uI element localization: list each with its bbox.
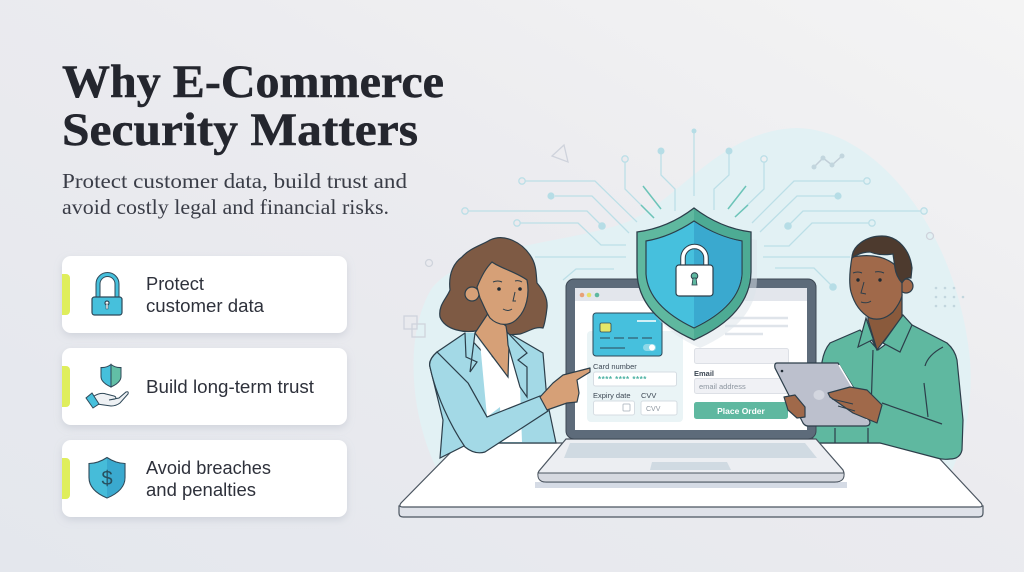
neck (868, 295, 902, 350)
teal accent strokes (641, 186, 748, 218)
label: protect customer data: Protect (146, 274, 204, 294)
man left hand (784, 395, 805, 418)
label: build long-term trust: Build long-term trust (146, 377, 314, 397)
decorative shapes (404, 145, 934, 337)
man (850, 236, 913, 352)
mini chart dots and dot grid (812, 154, 964, 307)
title: Why E-Commerce (62, 56, 444, 108)
card form fields: Card number (593, 362, 637, 371)
icon: padlock (92, 274, 122, 315)
title (62, 56, 444, 156)
neck (475, 312, 509, 377)
collar left (858, 318, 877, 350)
card: avoid breaches (62, 440, 347, 517)
laptop base (535, 482, 847, 488)
order form: Place Order (717, 406, 766, 416)
window dots (580, 293, 599, 297)
card: protect customer data (62, 256, 347, 333)
hair (440, 238, 547, 335)
card form fields: **** **** **** (598, 375, 647, 384)
subtitle: Protect customer data, build trust and (62, 169, 408, 193)
label: avoid breaches and penalties (146, 458, 271, 500)
jacket torso (430, 332, 556, 458)
subtitle (62, 169, 408, 219)
title: Security Matters (62, 104, 418, 156)
woman pointing hand (540, 368, 590, 410)
man right hand (828, 387, 882, 423)
credit card (593, 313, 662, 356)
card: build long-term trust (62, 348, 347, 425)
circuit nodes (547, 128, 842, 291)
card form fields: CVV (641, 391, 656, 400)
icon: hand holding shield (86, 364, 128, 408)
face details (856, 278, 882, 282)
collar right (883, 315, 912, 352)
shield (637, 208, 757, 348)
woman (430, 238, 556, 458)
head (850, 256, 902, 319)
ear (465, 287, 479, 301)
ear (899, 279, 913, 293)
table (399, 443, 983, 517)
icon: dollar shield: $ (101, 468, 113, 490)
arm (430, 352, 548, 453)
tablet (775, 363, 882, 426)
face details (497, 287, 522, 291)
label: avoid breaches and penalties: and penalties (146, 480, 256, 500)
order form: email address (699, 382, 746, 391)
label: protect customer data: customer data (146, 296, 265, 316)
subtitle: avoid costly legal and financial risks. (62, 195, 389, 219)
label: protect customer data (146, 274, 265, 316)
order form (694, 318, 788, 419)
card form fields: CVV (646, 406, 661, 413)
circuit lines (462, 131, 927, 287)
illustration: background blob (414, 128, 971, 475)
order form: Email (694, 369, 714, 378)
man torso (812, 325, 963, 459)
hair (852, 236, 912, 283)
shirt (480, 342, 522, 442)
form panel (587, 331, 683, 422)
face (477, 262, 528, 324)
label: avoid breaches and penalties: Avoid breaches (146, 458, 271, 478)
shield padlock (676, 247, 713, 296)
laptop screen (566, 279, 816, 439)
laptop (535, 279, 847, 488)
card form fields: Expiry date (593, 391, 631, 400)
card form fields (593, 362, 677, 415)
icon: dollar shield (89, 458, 125, 498)
lapels and jacket seams (465, 333, 477, 372)
